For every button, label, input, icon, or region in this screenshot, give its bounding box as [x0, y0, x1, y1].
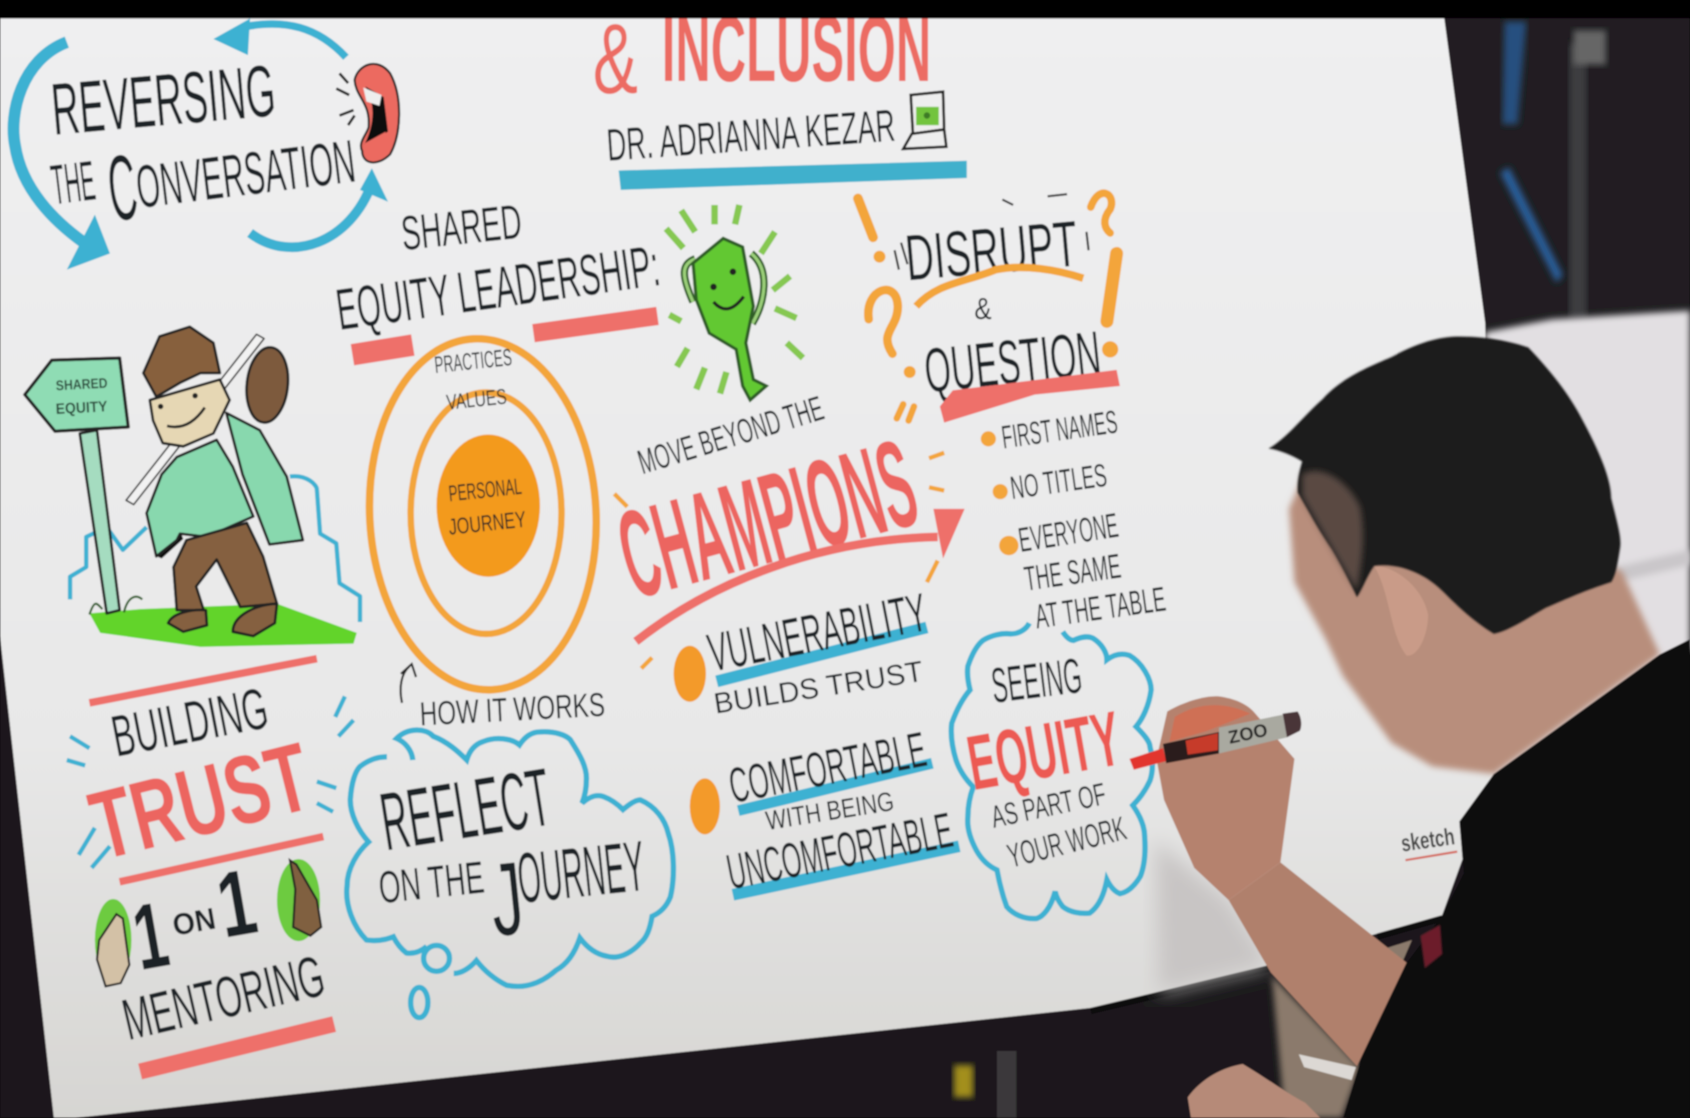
callout: 1 on 1 mentoring: ON	[170, 903, 218, 943]
neck and face	[1289, 464, 1660, 774]
thought bubble: seeing equity: EQUITY	[961, 696, 1127, 807]
callout: move beyond the champions	[605, 390, 965, 668]
author: Dr. Adrianna Kezar	[605, 100, 967, 190]
illustration: traveller with signpost: SHARED	[55, 375, 108, 393]
point: comfortable with being uncomfortable: UNCOMFORTABLE	[722, 802, 957, 900]
heading: shared equity leadership	[332, 195, 664, 355]
hand	[1156, 696, 1294, 900]
hand shadow on board	[1155, 841, 1270, 992]
marks: orange exclamations and question marks	[858, 193, 1117, 421]
top black bar	[0, 0, 1690, 18]
black polo shirt	[1343, 639, 1690, 1118]
list: first names, no titles, everyone the same: THE SAME	[1022, 548, 1123, 599]
callout: 1 on 1 mentoring	[95, 849, 334, 1071]
point: vulnerability builds trust: BUILDS TRUST	[712, 656, 926, 721]
list: first names, no titles, everyone the same: FIRST NAMES	[999, 404, 1120, 455]
icon: laptop	[903, 92, 946, 149]
heading: reversing the conversation: THE	[48, 148, 105, 216]
diagram: concentric circles how it works: JOURNEY	[447, 507, 527, 540]
icon: red marker	[1130, 712, 1301, 770]
thought bubble: reflect on the journey: J	[485, 839, 529, 958]
diagram: concentric circles how it works: VALUES	[445, 384, 508, 415]
callout: move beyond the champions: MOVE BEYOND THE	[634, 390, 828, 482]
icon: green trophy	[666, 205, 803, 400]
ear	[1374, 566, 1428, 656]
other hand	[1188, 1064, 1320, 1118]
person: artist drawing	[1156, 336, 1690, 1118]
point: vulnerability builds trust: VULNERABILITY	[703, 582, 932, 683]
hair	[1269, 336, 1621, 634]
arrows: conversation cycle	[14, 18, 388, 270]
thought bubble: seeing equity: SEEING	[988, 647, 1085, 714]
callout: building trust: TRUST	[80, 721, 321, 881]
heading: disrupt and question: &	[974, 293, 992, 326]
icon: shouting mouth	[336, 64, 399, 163]
thought bubble: seeing equity: AS PART OF	[988, 776, 1109, 835]
thought bubble: reflect on the journey: ON THE	[376, 852, 487, 913]
thought bubble: reflect on the journey: REFLECT	[374, 752, 557, 868]
heading: disrupt and question: QUESTION	[921, 318, 1104, 406]
title: and inclusion: &	[593, 4, 638, 115]
list: first names, no titles, everyone the same: EVERYONE	[1016, 507, 1121, 560]
list: first names, no titles, everyone the same: NO TITLES	[1008, 457, 1109, 506]
callout: 1 on 1 mentoring: 1	[126, 882, 175, 990]
list: first names, no titles, everyone the same: AT THE TABLE	[1033, 581, 1168, 636]
list: first names, no titles, everyone the same	[981, 404, 1168, 636]
heading: reversing the conversation: ONVERSATION	[132, 127, 359, 221]
heading: disrupt and question: DISRUPT	[902, 207, 1081, 294]
forearm	[1229, 862, 1407, 1066]
heading: disrupt and question	[858, 193, 1120, 423]
point: vulnerability builds trust	[674, 582, 932, 721]
callout: 1 on 1 mentoring: MENTORING	[117, 944, 331, 1053]
heading: reversing the conversation	[47, 50, 361, 248]
title: and inclusion	[593, 0, 931, 115]
board frame edge	[1091, 918, 1442, 1011]
shirt badge	[1421, 925, 1442, 968]
logo: the sketch: sketch	[1399, 824, 1456, 858]
callout: building trust: BUILDING	[106, 676, 273, 770]
heading: shared equity leadership: SHARED	[399, 195, 524, 261]
author: Dr. Adrianna Kezar: DR. ADRIANNA KEZAR	[605, 100, 897, 171]
whiteboard scene: CHAMPIONS	[605, 414, 930, 625]
logo: the sketch	[1399, 824, 1457, 860]
callout: building trust	[67, 659, 354, 882]
title: and inclusion: INCLUSION	[662, 0, 931, 101]
thought bubble: reflect on the journey	[347, 730, 673, 1018]
heading: reversing the conversation: REVERSING	[48, 50, 279, 151]
illustration: traveller with signpost	[25, 327, 360, 647]
point: comfortable with being uncomfortable: WITH BEING	[764, 786, 896, 836]
diagram: concentric circles how it works: PERSONAL	[447, 474, 523, 506]
icon: red marker: ZOO	[1226, 719, 1269, 748]
illustration: traveller with signpost: EQUITY	[55, 398, 108, 418]
thought bubble: seeing equity	[951, 623, 1152, 919]
thought bubble: seeing equity: YOUR WORK	[1004, 810, 1130, 876]
point: comfortable with being uncomfortable: COMFORTABLE	[724, 721, 931, 814]
point: comfortable with being uncomfortable	[690, 721, 959, 900]
heading: shared equity leadership: EQUITY LEADERSHIP:	[332, 233, 664, 343]
icon: pointing hands	[97, 860, 321, 986]
callout: 1 on 1 mentoring: 1	[210, 849, 264, 958]
thought bubble: reflect on the journey: OURNEY	[514, 827, 648, 919]
diagram: concentric circles how it works: PRACTICES	[433, 345, 513, 379]
diagram: concentric circles how it works: HOW IT WORKS	[419, 687, 606, 734]
diagram: concentric circles how it works	[361, 333, 606, 734]
heading: reversing the conversation: C	[102, 134, 143, 241]
